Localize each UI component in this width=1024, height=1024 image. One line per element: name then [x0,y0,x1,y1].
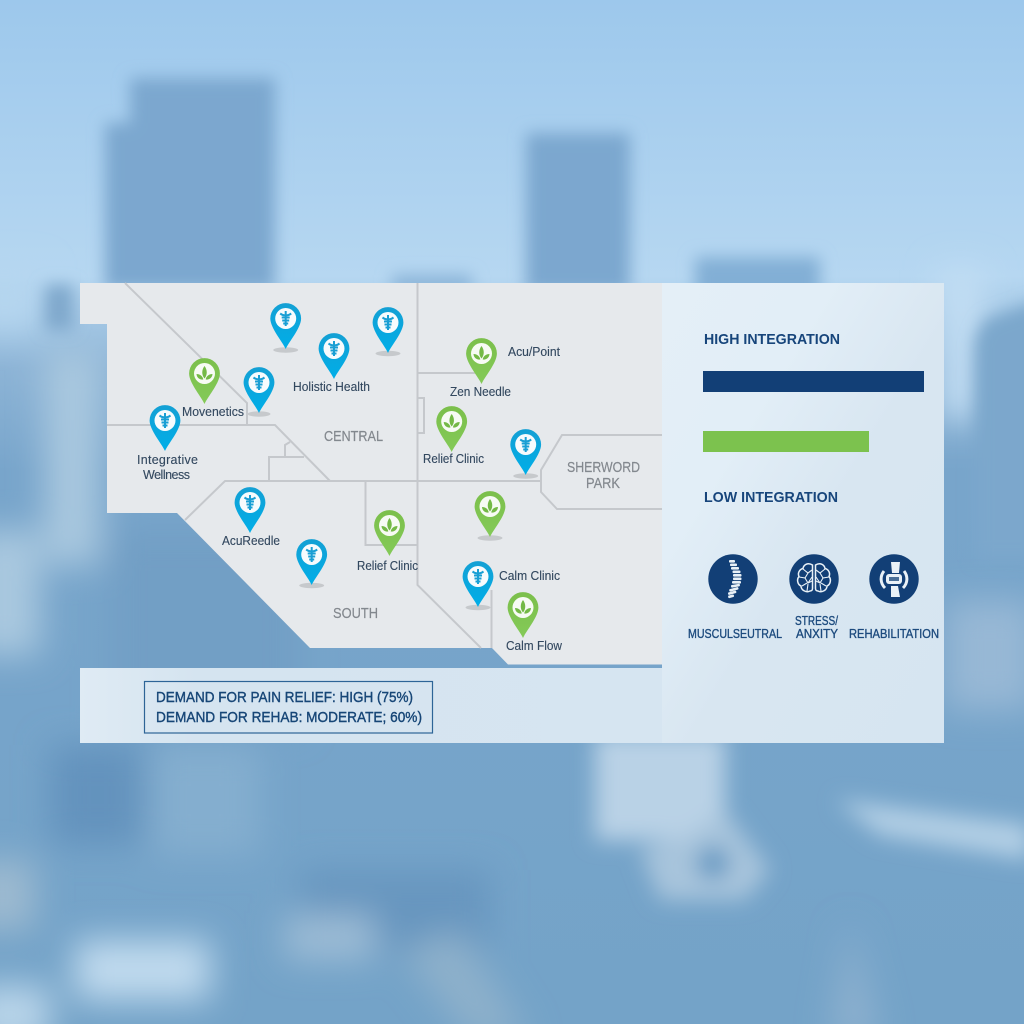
pin: blue north east [373,307,403,356]
pin: integrative wellness: Wellness [143,468,190,482]
pin: green east [475,491,505,541]
label: stress anxiety [795,614,839,641]
pin: zen needle: Zen Needle [450,385,511,399]
pin: calm flow: Calm Flow [506,639,563,653]
icon: brain [789,554,839,604]
pin: relief clinic central [423,406,484,466]
pin: acuneedle: AcuReedle [222,534,280,548]
pin: zen needle [450,338,511,399]
bar: high integration [703,371,924,392]
pin: integrative wellness [137,405,198,482]
zone label: sherword park [567,460,640,492]
pin: calm clinic [463,561,560,610]
pin: blue north [270,303,301,353]
pin: relief clinic south [357,510,418,573]
label: rehabilitation: REHABILITATION [849,627,939,641]
pin: blue centre west [244,367,274,417]
pin: relief clinic central: Relief Clinic [423,452,484,466]
label: stress anxiety: ANXITY [796,627,839,641]
pin: movenetics [182,358,244,419]
icon: spine [708,554,758,604]
pin: blue south [296,539,327,588]
panel: demand strip [80,668,662,743]
pin: blue east [510,429,541,479]
pin: holistic health [293,333,370,394]
pin: integrative wellness: Integrative [137,453,198,467]
pin: acuneedle [222,487,280,548]
pin: calm flow [506,592,563,653]
zone label: central: CENTRAL [324,429,383,445]
bar: low integration [703,431,869,452]
heading: low integration: LOW INTEGRATION [704,489,838,506]
icon: joint rehabilitation [869,554,919,604]
pin: relief clinic south: Relief Clinic [357,559,418,573]
pin: holistic health: Holistic Health [293,380,370,394]
zone label: sherword park: SHERWORD [567,460,640,476]
zone label: sherword park: PARK [586,476,620,492]
label: acupoint: Acu/Point [508,345,561,359]
pin: movenetics: Movenetics [182,405,244,419]
map road lines [107,283,662,648]
heading: high integration: HIGH INTEGRATION [704,331,840,348]
panel: district map [80,283,662,664]
panel: legend [662,283,944,743]
label: musculoskeletal: MUSCULSEUTRAL [688,627,782,641]
callout: demand box: DEMAND FOR REHAB: MODERATE; 60%) [156,709,422,726]
label: stress anxiety: STRESS/ [795,614,838,628]
callout: demand box [144,682,432,733]
pin: calm clinic: Calm Clinic [499,569,560,583]
zone label: south: SOUTH [333,606,378,622]
callout: demand box: DEMAND FOR PAIN RELIEF: HIGH (75%) [156,689,413,706]
